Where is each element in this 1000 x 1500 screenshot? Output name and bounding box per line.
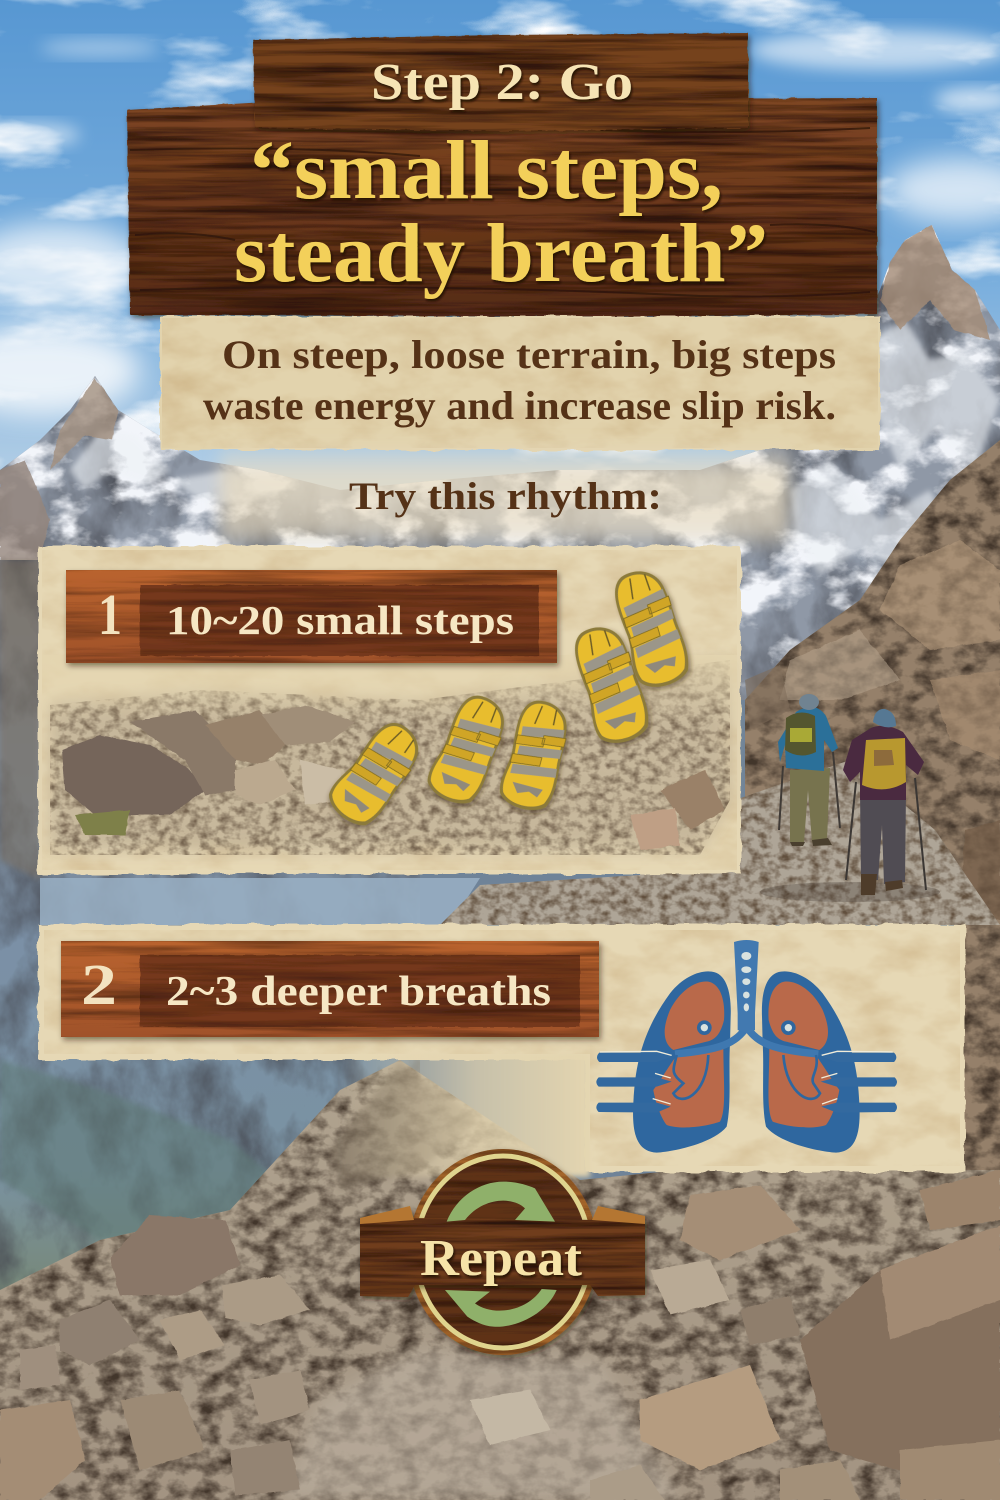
number 2: 2 xyxy=(81,952,117,1017)
scree illustration xyxy=(42,655,737,855)
background: gravel trail by hikers xyxy=(440,760,1000,925)
panel: step 2 deeper breaths xyxy=(38,924,965,1177)
heading: step label: Step 2: Go xyxy=(371,54,633,111)
label: try this rhythm: Try this rhythm: xyxy=(349,475,662,518)
heading: main title line 1: “small steps, xyxy=(250,124,723,217)
background: left valley ridges xyxy=(0,560,480,1320)
inner plate xyxy=(140,585,539,656)
background: snowy mountain range xyxy=(0,225,1000,700)
board: step 2 label xyxy=(61,941,599,1037)
background: right rocky slope xyxy=(745,440,1000,1180)
boot 3 xyxy=(496,696,576,816)
wooden title boards xyxy=(127,33,877,317)
paper: intro note xyxy=(160,316,880,450)
boot 2 xyxy=(422,689,516,811)
left lung xyxy=(633,971,731,1153)
background: sky xyxy=(0,0,1000,620)
badge: repeat xyxy=(360,1149,645,1355)
label: try this rhythm xyxy=(220,445,790,550)
hikers xyxy=(760,694,940,902)
background: foreground rocks and trail xyxy=(0,1060,1000,1500)
icon: bottom green arrow xyxy=(445,1289,557,1327)
boot 4 xyxy=(568,620,654,749)
repeat text: Repeat xyxy=(420,1230,583,1287)
boots trail xyxy=(322,564,694,834)
badge disc xyxy=(408,1149,598,1355)
badge plank xyxy=(360,1206,645,1297)
icon: top green arrow xyxy=(447,1182,555,1222)
boot 5 xyxy=(608,564,694,693)
inner plate xyxy=(140,955,580,1027)
boot 1 xyxy=(322,714,432,834)
icon: lungs xyxy=(596,940,897,1153)
intro text line 2: waste energy and increase slip risk. xyxy=(203,383,836,428)
right lung xyxy=(762,971,860,1153)
heading: main title line 2: steady breath” xyxy=(234,207,768,300)
number 1: 1 xyxy=(98,582,122,647)
board: main title plank xyxy=(127,98,877,317)
snow fields xyxy=(70,320,1000,575)
intro text line 1: On steep, loose terrain, big steps xyxy=(222,332,836,377)
step 2 text: 2~3 deeper breaths xyxy=(166,969,551,1015)
hiker: right, maroon jacket xyxy=(843,709,926,895)
arrows in xyxy=(596,1053,897,1113)
board: step plank xyxy=(253,33,748,131)
trachea xyxy=(734,940,759,1033)
panel: step 1 small steps xyxy=(38,546,741,874)
bronchi xyxy=(675,1027,818,1054)
step 1 text: 10~20 small steps xyxy=(166,597,514,643)
hiker: left, blue jacket xyxy=(778,694,840,846)
board: step 1 label xyxy=(66,570,557,663)
